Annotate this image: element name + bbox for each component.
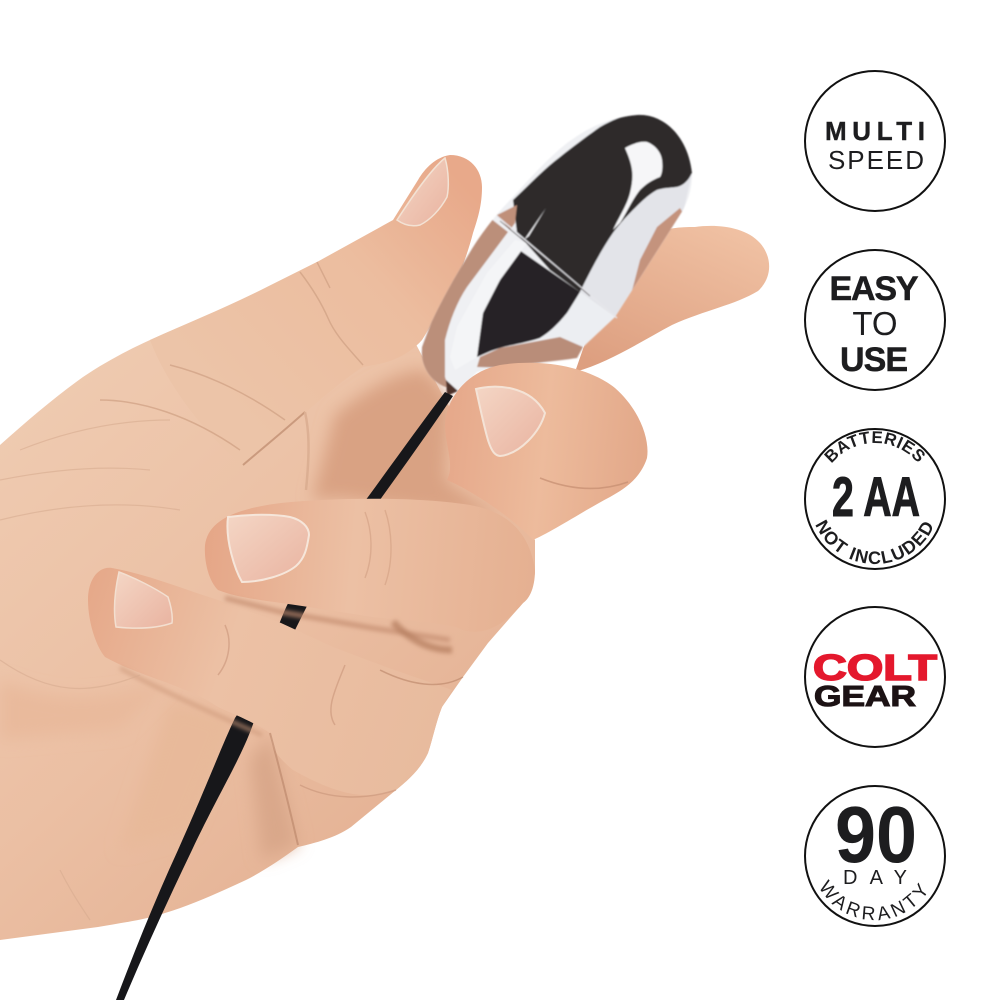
lowest finger bbox=[88, 568, 452, 795]
badge: colt gear: GEAR bbox=[814, 681, 916, 713]
shaded palm hollow bbox=[0, 370, 500, 860]
badge: easy to use: EASY bbox=[830, 270, 919, 308]
white reflection bbox=[476, 246, 522, 356]
chrome highlight bbox=[613, 142, 662, 230]
lower knuckle crease bbox=[218, 625, 463, 845]
palm skin lines bbox=[0, 420, 180, 920]
badge: 90 day warranty bbox=[804, 785, 946, 927]
silver lower band bbox=[580, 173, 692, 317]
lowest fingernail bbox=[115, 572, 172, 628]
pinching index finger bbox=[445, 363, 648, 540]
top skin reflection bbox=[497, 205, 517, 230]
dark lower reflection bbox=[477, 247, 580, 357]
bottom skin reflection bbox=[477, 337, 583, 368]
badge: multi speed: MULTI bbox=[825, 116, 925, 146]
badge: multi speed bbox=[805, 71, 945, 211]
badge: batteries: 2 AA bbox=[832, 465, 920, 528]
badge: colt gear: COLT bbox=[813, 647, 937, 688]
chrome bullet bbox=[420, 114, 692, 396]
badge: colt gear bbox=[805, 607, 945, 747]
badge: 90 day warranty: WARRANTY bbox=[820, 879, 926, 920]
badge: easy to use: TO bbox=[852, 305, 898, 342]
badge: easy to use: USE bbox=[840, 341, 908, 379]
badge: easy to use bbox=[805, 250, 945, 390]
badge: batteries: BATTERIES bbox=[824, 431, 925, 463]
thumb knuckle creases bbox=[100, 262, 363, 490]
finger contact shadows bbox=[120, 598, 452, 735]
index fingernail bbox=[476, 387, 545, 456]
right skin reflection bbox=[632, 208, 682, 290]
middle fingernail bbox=[227, 515, 309, 582]
photo: hand holding the chrome bullet bbox=[0, 114, 769, 1000]
rear finger behind the bullet bbox=[575, 226, 769, 372]
control cord bbox=[116, 392, 453, 1000]
badge: batteries: NOT INCLUDED bbox=[816, 520, 932, 564]
badge: 90 day warranty: 90 bbox=[835, 790, 917, 879]
left skin reflection bbox=[420, 218, 508, 392]
palm and wrist base bbox=[0, 262, 535, 940]
thumbnail bbox=[397, 158, 448, 226]
badge: multi speed: SPEED bbox=[828, 145, 924, 175]
middle finger bbox=[205, 499, 535, 632]
bullet base tip bbox=[446, 380, 458, 396]
finger underside crease bbox=[540, 478, 628, 488]
seam line bbox=[497, 216, 617, 318]
badge: 90 day warranty: DAY bbox=[843, 867, 907, 889]
small highlight bbox=[524, 208, 546, 240]
knuckle creases bbox=[365, 510, 391, 585]
badge: batteries bbox=[804, 428, 946, 570]
thumb bbox=[150, 155, 482, 465]
dark upper reflection bbox=[513, 114, 692, 292]
